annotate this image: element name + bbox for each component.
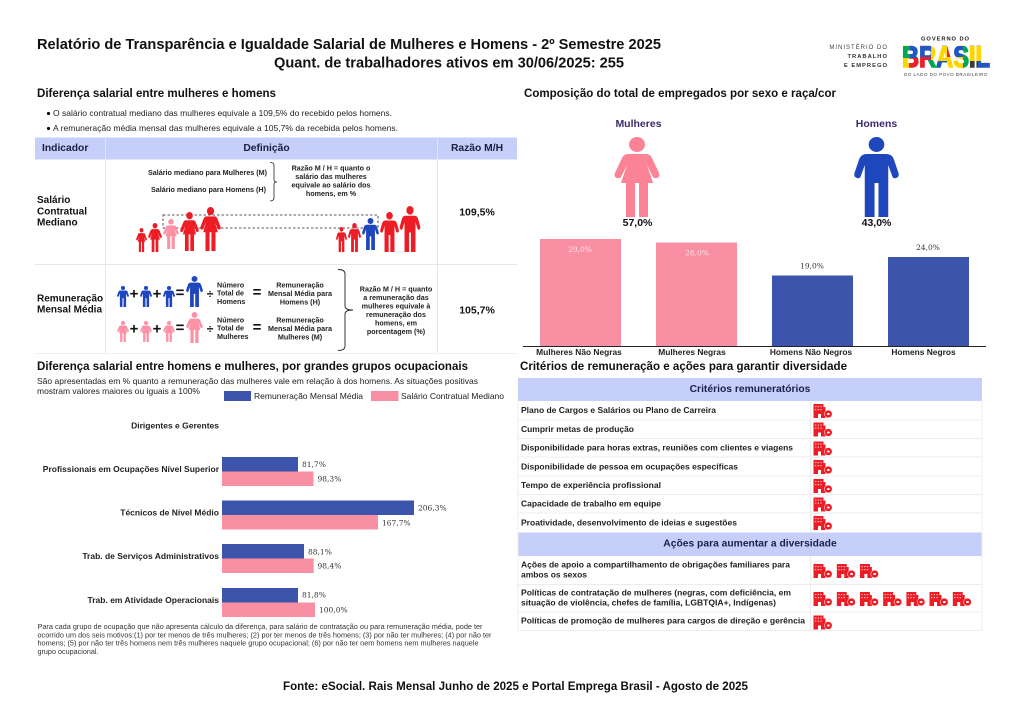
value: 109,5%: 109,5%: [459, 206, 495, 218]
bar chart: occupational groups: 100,0%: [319, 606, 348, 614]
text block: bullets: A remuneração média mensal das mulheres equivale a 105,7% da recebida pelos homens.: [53, 123, 398, 133]
row label: salário contratual mediano: [37, 195, 87, 228]
brace and ratio text: mulheres equivale à: [362, 302, 431, 310]
formula: women average: =: [176, 320, 185, 336]
brace and ratio text: Razão M / H = quanto: [360, 284, 433, 294]
formula: women average: +: [130, 320, 139, 338]
table header: Razão M/H: [451, 143, 503, 154]
table header: Indicador: [42, 143, 88, 154]
text block: footnote: grupo ocupacional.: [38, 649, 99, 656]
formula: women average: ÷: [207, 322, 214, 336]
brace and ratio text: a remuneração das: [363, 293, 429, 302]
formula: men average: Mensal Média para: [268, 289, 333, 298]
formula: men average: +: [153, 286, 162, 302]
action rows: [521, 560, 805, 626]
definition text: salário mediano: Salário mediano para Mulheres (M): [148, 168, 268, 177]
formula: women average: +: [153, 320, 162, 338]
bar chart: occupational groups: 98,3%: [318, 474, 341, 484]
text block: footnote: ocorrido um dos seis motivos:(1) por ter menos de três mulheres; (2) por ter menos de três homens; (3) por não ter mulheres; (4) por não ter: [38, 632, 492, 640]
brace and ratio text: remuneração dos: [366, 310, 426, 319]
icon: mulheres 57,0%: Mulheres: [615, 118, 662, 130]
row label: remuneração mensal média: Remuneração: [37, 294, 103, 304]
table header: [35, 138, 517, 160]
logo: Ministério do Trabalho e Emprego: E EMPREGO: [844, 63, 888, 69]
criteria rows: Disponibilidade de pessoa em ocupações específicas: [521, 462, 738, 472]
title: Quant. de trabalhadores ativos em 30/06/2025: 255: [274, 56, 624, 72]
formula: men average: Homens: [217, 297, 245, 306]
title: Relatório de Transparência e Igualdade Salarial de Mulheres e Homens - 2º Semestre 2025: [37, 37, 661, 53]
heading: diferença por grupos ocupacionais: Diferença salarial entre homens e mulheres, por grandes grupos ocupacionais: [37, 361, 468, 373]
row label: salário contratual mediano: Contratual: [37, 206, 87, 218]
brace and ratio text: porcentagem (%): [367, 327, 426, 336]
definition text: salário mediano: Razão M / H = quanto o: [292, 164, 371, 172]
criteria rows: [521, 406, 793, 528]
icon: homens 43,0%: 43,0%: [862, 217, 892, 229]
bar chart: composition by sex and race: 24,0%: [916, 243, 940, 252]
icon: mulheres 57,0%: 57,0%: [623, 217, 653, 229]
header: critérios remuneratórios: Critérios remuneratórios: [690, 384, 811, 395]
text block: bullets: [47, 108, 398, 133]
bar chart: composition by sex and race: Homens Não Negros: [770, 347, 853, 357]
formula: women average: Mulheres: [217, 332, 249, 341]
formula: men average: +: [130, 286, 139, 302]
action rows: situação de violência, chefes de família, LGBTQIA+, Indígenas): [521, 598, 776, 608]
text block: bullets: O salário contratual mediano das mulheres equivale a 109,5% do recebido pelos homens.: [53, 108, 392, 118]
bar chart: composition by sex and race: 28,0%: [685, 248, 709, 258]
heading: critérios: Critérios de remuneração e ações para garantir diversidade: [520, 361, 847, 373]
bar chart: occupational groups: 81,8%: [302, 590, 326, 600]
bar chart: occupational groups: 88,1%: [308, 548, 332, 556]
row label: remuneração mensal média: Mensal Média: [37, 304, 102, 316]
definition text: salário mediano: salário das mulheres: [295, 172, 367, 181]
formula: women average: =: [253, 319, 262, 336]
bar chart: composition by sex and race: Mulheres Negras: [658, 347, 726, 357]
criteria rows: Tempo de experiência profissional: [521, 481, 661, 490]
formula: women average: Total de: [217, 324, 244, 332]
icon: homens 43,0%: Homens: [856, 118, 897, 130]
header: ações para aumentar a diversidade: [518, 532, 982, 556]
criteria rows: Proatividade, desenvolvimento de ideias e sugestões: [521, 518, 737, 528]
criteria rows: Plano de Cargos e Salários ou Plano de Carreira: [521, 406, 716, 415]
definition text: salário mediano: equivale ao salário dos: [291, 180, 371, 190]
bar chart: occupational groups: 81,7%: [302, 460, 326, 469]
icons: criteria companies: [814, 404, 832, 530]
text block: chart explanation: [37, 376, 478, 396]
bar chart: occupational groups: Dirigentes e Gerentes: [131, 420, 219, 430]
header: critérios remuneratórios: [518, 378, 982, 401]
formula: men average: Número: [217, 280, 245, 290]
logo: Ministério do Trabalho e Emprego: MINISTÉRIO DO: [829, 44, 888, 51]
definition text: salário mediano: Salário mediano para Homens (H): [151, 185, 267, 194]
icons: action companies: [814, 564, 971, 630]
formula: men average: Total de: [217, 288, 244, 298]
formula: men average: Remuneração: [276, 280, 324, 290]
brace and ratio text: [338, 270, 433, 350]
formula: women average: Remuneração: [276, 316, 324, 324]
action rows: ambos os sexos: [521, 570, 587, 580]
value: 105,7%: 105,7%: [459, 304, 495, 316]
text block: footnote: [38, 624, 492, 656]
bar chart: occupational groups: 206,3%: [418, 504, 447, 512]
row label: remuneração mensal média: [37, 294, 103, 316]
text block: chart explanation: São apresentadas em % quanto a remuneração das mulheres vale em relação à dos homens. As situações positivas: [37, 376, 478, 386]
brace and ratio text: homens, em: [375, 318, 417, 328]
action rows: Ações de apoio a compartilhamento de obrigações familiares para: [521, 560, 790, 570]
row label: salário contratual mediano: Salário: [37, 195, 70, 206]
row label: salário contratual mediano: Mediano: [37, 218, 78, 228]
logo: Ministério do Trabalho e Emprego: TRABALHO: [847, 54, 888, 60]
definition text: salário mediano: homens, em %: [306, 189, 357, 198]
icon: mulheres 57,0%: [615, 118, 662, 229]
footer: source: Fonte: eSocial. Rais Mensal Junho de 2025 e Portal Emprega Brasil - Agosto de 2025: [283, 681, 749, 693]
bar chart: occupational groups: Técnicos de Nível Médio: [120, 508, 219, 518]
logo: Governo do Brasil: BRASIL: [902, 41, 990, 74]
panel: indicator table: [35, 137, 517, 354]
legend: Salário Contratual Mediano: [401, 391, 504, 401]
table header: Definição: [243, 143, 290, 154]
legend: Remuneração Mensal Média: [254, 391, 363, 401]
title: [37, 37, 661, 72]
icon: homens 43,0%: [854, 118, 899, 229]
bar chart: occupational groups: [43, 420, 447, 617]
bar chart: composition by sex and race: 29,0%: [568, 245, 592, 254]
formula: women average: Mulheres (M): [278, 332, 323, 342]
bar chart: occupational groups: Profissionais em Ocupações Nível Superior: [43, 464, 220, 474]
logo: Governo do Brasil: DO LADO DO POVO BRASILEIRO: [904, 72, 988, 77]
heading: composição: Composição do total de empregados por sexo e raça/cor: [524, 88, 837, 100]
panel: criteria table: [518, 378, 982, 630]
formula: men average: Homens (H): [280, 298, 321, 306]
bar chart: composition by sex and race: [523, 239, 986, 357]
logo: Governo do Brasil: GOVERNO DO: [921, 36, 970, 42]
text block: footnote: Para cada grupo de ocupação que não apresenta cálculo da diferença, para salário de contratação ou para remuneração média, pode ter: [38, 624, 483, 631]
action rows: Políticas de promoção de mulheres para cargos de direção e gerência: [521, 616, 805, 626]
formula: men average: ÷: [207, 287, 214, 301]
criteria rows: Cumprir metas de produção: [521, 425, 634, 434]
bar chart: composition by sex and race: 19,0%: [800, 262, 824, 270]
text block: footnote: homens; (5) por não ter três homens nem três mulheres naquele grupo ocupacional; (6) por não ter nem homens nem mulheres naquele: [38, 640, 479, 648]
legend: [224, 391, 504, 401]
formula: men average: =: [176, 284, 185, 302]
criteria rows: Disponibilidade para horas extras, reuniões com clientes e viagens: [521, 444, 793, 452]
definition text: salário mediano: [148, 162, 371, 201]
heading: diferença salarial: Diferença salarial entre mulheres e homens: [37, 88, 276, 100]
header: ações para aumentar a diversidade: Ações para aumentar a diversidade: [663, 538, 837, 550]
formula: women average: Mensal Média para: [268, 324, 333, 333]
bar chart: occupational groups: Trab. de Serviços Administrativos: [82, 551, 219, 561]
bar chart: occupational groups: 167,7%: [382, 518, 411, 528]
bar chart: composition by sex and race: Mulheres Não Negras: [536, 347, 622, 357]
text block: chart explanation: mostram valores maiores ou iguais a 100%: [37, 386, 201, 396]
formula: men average: =: [253, 284, 262, 301]
criteria rows: Capacidade de trabalho em equipe: [521, 500, 661, 508]
formula: women average: Número: [217, 316, 245, 324]
bar chart: composition by sex and race: Homens Negros: [891, 347, 956, 357]
logo: Ministério do Trabalho e Emprego: [829, 44, 888, 69]
logo: Governo do Brasil: [902, 36, 990, 77]
bar chart: occupational groups: Trab. em Atividade Operacionais: [88, 595, 219, 605]
bar chart: occupational groups: 98,4%: [318, 562, 341, 570]
action rows: Políticas de contratação de mulheres (negras, com deficiência, em: [521, 588, 791, 598]
formula: women average: [117, 312, 333, 343]
pictogram: women and men ordered by salary: [136, 206, 420, 252]
formula: men average: [117, 276, 333, 307]
